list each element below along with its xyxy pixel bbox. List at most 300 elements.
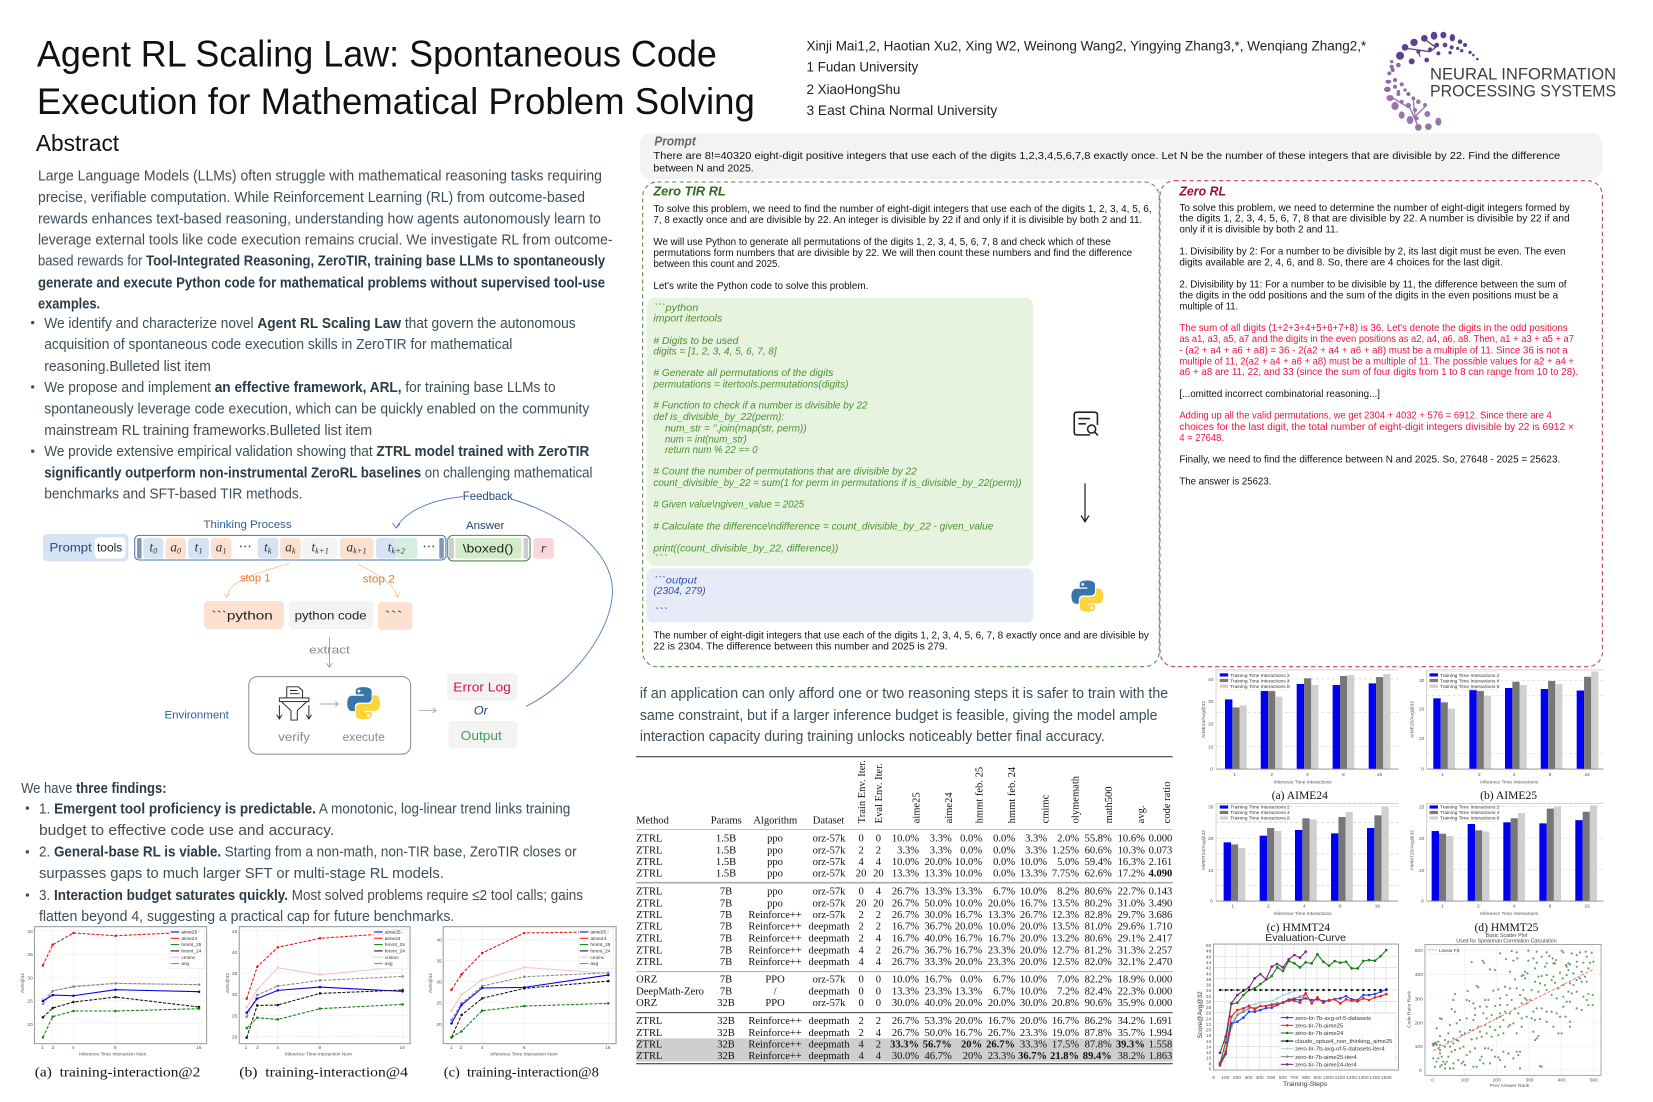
table rows: deepmath [809,922,850,933]
caption b: (b) training-interaction@4 [239,1064,408,1080]
thinking process token sequence: k [292,545,296,555]
error log box: Error Log [453,681,511,695]
bar chart: AIME25: 2 [1478,772,1481,778]
caption: HMMT24: (c) HMMT24 [1267,921,1330,934]
line chart: training-interaction@4: 40 [232,950,238,956]
line chart: evaluation curve: 900 [1314,1075,1322,1081]
table rows: 2 [858,845,864,856]
line chart: training-interaction@2: 25 [27,999,33,1005]
authors and affiliations: 1 Fudan University [806,60,918,75]
reasoning text: Let's write the Python code to solve this problem. [653,281,868,292]
table rows: Reinforce++ [748,1016,802,1027]
table rows: 0.0% [993,857,1015,868]
line chart: evaluation curve: 300 [1244,1075,1253,1081]
table rows: 16.7% [1052,1016,1079,1027]
table rows: 13.2% [1052,934,1079,945]
line chart: training-interaction@4: AVG@32 [225,973,231,993]
code block: ```python [655,302,699,314]
bar chart: HMMT24 [1201,803,1398,917]
legend: zero-tir-7b-aime25 [1295,1023,1344,1029]
bar chart: AIME24 [1201,670,1398,785]
bar chart: AIME24: 20 [1208,721,1214,727]
table rows: 36.7% [925,945,952,956]
reasoning text: To solve this problem, we need to determine the number of eight-digit integers formed by [1179,203,1571,214]
table rows: 7B [720,945,732,956]
code block: import itertools [653,314,722,325]
line chart: training-interaction@8: AVG@32 [428,973,434,993]
text block: abstract: generate and execute Python code for mathematical problems without supervised tool-use [38,275,605,291]
table rows: orz-57k [813,974,846,985]
bar chart: AIME25: 10 [1419,736,1425,742]
table rows: 2 [858,934,864,945]
table rows: 32B [717,1051,735,1062]
thinking process token sequence: k+1 [315,545,329,555]
table rows: orz-57k [813,857,846,868]
table rows: 33.3% [1020,1039,1047,1050]
line chart: evaluation curve: 1200 [1346,1075,1357,1081]
table rows: ZTRL [636,1028,662,1039]
table rows: 0.0% [960,974,982,985]
table rows: 3.3% [1025,845,1047,856]
table rows: ppo [767,857,783,868]
table rows: 7B [720,910,732,921]
feedback arrow [393,489,612,706]
line chart: training-interaction@8: 20 [436,1022,442,1028]
bar chart: HMMT25: 25 [1419,805,1425,811]
table rows: 4 [858,957,864,968]
table rows: ppo [767,834,783,845]
table rows: 1.25% [1052,845,1079,856]
table rows: 26.7% [1020,910,1047,921]
python code tokens: ``` [385,608,403,622]
table rows: 21.8% [1050,1051,1079,1062]
table rows: Reinforce++ [748,1039,802,1050]
table rows: 20.0% [955,1016,982,1027]
table rows: 6.7% [993,986,1015,997]
table rows: 6.7% [993,887,1015,898]
line chart: evaluation curve: 400 [1256,1075,1264,1081]
table rows: 81.2% [1085,945,1112,956]
caption: HMMT25: (d) HMMT25 [1474,921,1539,934]
line chart: training-interaction@4: 2 [256,1045,259,1051]
table rows: 40.0% [925,934,952,945]
line chart: training-interaction@8: hmmt_25 [590,942,611,948]
scatter plot [1407,933,1601,1089]
bar chart: HMMT25: 16 [1584,904,1590,910]
line chart: evaluation curve: 1300 [1358,1075,1369,1081]
reasoning text: The answer is 25623. [1179,476,1271,487]
line chart: training-interaction@4: 30 [232,992,238,998]
table rows: 17.2% [1118,869,1145,880]
line chart: training-interaction@2: aime25 [181,930,197,936]
table rows: 20.0% [1020,957,1047,968]
bar chart: HMMT24: Training Time Interactions 4 [1230,810,1290,816]
line chart: training-interaction@4: 4 [276,1045,279,1051]
bar chart: HMMT24: 20 [1208,836,1214,842]
line chart: evaluation curve: 46 [1206,954,1212,960]
text block: abstract: based rewards for Tool-Integrated Reasoning, ZeroTIR, training base LLMs to spontaneously [38,254,606,270]
table rows: 23.3% [988,945,1015,956]
table rows: 12.5% [1052,957,1079,968]
table rows: 26.7% [892,910,919,921]
line chart: evaluation curve: 1500 [1381,1075,1392,1081]
line chart: training-interaction@8: cmimc [590,955,605,961]
legend: claude_optus4_non_thinking_aime25 [1295,1039,1393,1045]
table rows: orz-57k [813,834,846,845]
bar chart: AIME24: Training Time Interactions 8 [1230,684,1290,690]
table rows: ppo [767,887,783,898]
environment box: verify [278,732,310,744]
table rows: 0 [858,986,864,997]
line chart: training-interaction@8: 8 [523,1045,526,1051]
table rows: 26.7% [986,1039,1015,1050]
table rows: 0.0% [960,834,982,845]
table rows: 50.0% [925,898,952,909]
table header: hmmt feb. 25 [975,767,986,823]
legend: zero-tir-7b-avg-of-5-datasets [1295,1016,1371,1022]
table rows: 56.7% [923,1039,952,1050]
line chart: training-interaction@8: 16 [605,1045,611,1051]
table rows: deepmath [809,1028,850,1039]
table rows: ORZ [636,998,657,1009]
table rows: Reinforce++ [748,934,802,945]
scatter plot: 500 [1590,1077,1598,1083]
table rows: 4 [858,857,864,868]
answer box: \boxed() [463,541,513,555]
table rows: 32B [717,1028,735,1039]
table rows: 2 [876,1039,881,1050]
table rows: 20 [856,898,866,909]
table rows: 36.7% [1018,1051,1047,1062]
line chart: training-interaction@2: 8 [114,1045,117,1051]
reasoning text: Finally, we need to find the difference between N and 2025. So, 27648 - 2025 = 25623. [1179,455,1560,466]
bar chart: HMMT25: 2 [1477,904,1480,910]
table rows: 10.0% [892,834,919,845]
table rows: ZTRL [636,834,662,845]
bar chart: HMMT25: 4 [1513,904,1516,910]
line chart: evaluation curve: 600 [1279,1075,1287,1081]
table rows: deepmath [809,1039,850,1050]
curves [1220,950,1386,1066]
line chart: evaluation curve: 14 [1206,1044,1212,1050]
scatter legend [1427,946,1460,954]
table rows: 16.3% [1118,857,1145,868]
table rows: 20% [963,1051,982,1062]
thinking process token sequence: k+2 [391,545,406,555]
code block [647,298,1033,566]
reasoning text: 1. Divisibility by 2: For a number to be divisible by 2, its last digit must be even. The even [1179,247,1566,258]
text block: findings [21,781,583,925]
table rows: 20.8% [1052,998,1079,1009]
table rows: 10.0% [1020,974,1047,985]
table rows: 16.7% [925,974,952,985]
table rows: 4 [876,957,882,968]
table rows: 87.8% [1085,1028,1112,1039]
scatter plot: 500 [1415,948,1423,954]
table rows: 19.0% [1052,1028,1079,1039]
table header: hmmt feb. 24 [1007,766,1018,823]
table rows: 2 [876,945,881,956]
line chart: training-interaction@4: 20 [232,1034,238,1040]
icon: document search [1074,412,1098,435]
table rows: 53.3% [925,1016,952,1027]
thinking process token sequence: a [216,539,222,554]
stop arrows: stop 2 [363,574,395,586]
table rows: 2 [858,1028,864,1039]
line chart: evaluation curve: 12 [1206,1050,1212,1056]
table rows: 1.5B [716,834,736,845]
code block: count_divisible_by_22 = sum(1 for perm in permutations if is_divisible_by_22(perm)) [653,478,1022,489]
line chart: evaluation curve: 28 [1206,1005,1212,1011]
bar chart: HMMT25: HMMT25/Avg@32 [1410,830,1416,870]
scatter plot: Basic Scatter Plot [1486,933,1528,939]
line chart: training-interaction@8: avg [590,962,598,967]
panel: prompt: There are 8!=40320 eight-digit positive integers that use each of the digits 1,2,3,4,5,6,7,8 exactly once. Let N be the number of these integers that are divisible by 22. Find the difference [653,151,1560,162]
line chart: evaluation curve: 20 [1206,1028,1212,1034]
heading: Zero TIR RL: Zero TIR RL [652,183,726,198]
table rows: 29.6% [1118,922,1145,933]
table rows: 20 [873,898,884,909]
reasoning text: between this count and 2025. [653,259,780,270]
line chart: training-interaction@4: hmmt_24 [385,948,405,954]
table rows: 89.4% [1083,1051,1112,1062]
line chart: training-interaction@8: 30 [436,980,442,986]
reasoning text: To solve this problem, we need to find the number of eight-digit integers that use each of the digits 1, 2, 3, 4, 5, 6, [653,204,1152,215]
table rows: 30.0% [892,998,919,1009]
bar chart: AIME24: 1 [1233,772,1236,778]
table rows: 1.710 [1149,922,1172,933]
thinking process token sequence: 1 [198,545,203,555]
thinking process token sequence [135,519,446,560]
table rows: 87.8% [1085,1039,1112,1050]
conclusion text: The number of eight-digit integers that use each of the digits 1, 2, 3, 4, 5, 6, 7, 8 exactly once and are divisible by [653,630,1150,641]
bar chart: HMMT25: Training Time Interactions 4 [1440,810,1500,816]
table rows: 4 [876,857,882,868]
table rows [636,834,1173,1062]
code block: num_str = ''.join(map(str, perm)) [665,424,807,435]
table rows: 33.3% [925,957,952,968]
table rows: 29.1% [1118,934,1145,945]
bar chart: HMMT24: 16 [1375,904,1380,910]
line chart: evaluation curve: 50 [1206,943,1212,949]
code block: num = int(num_str) [665,434,747,445]
bar chart: AIME24: 10 [1208,745,1214,751]
table rows: 80.6% [1085,887,1112,898]
title [37,33,755,122]
prompt box: Prompt [50,541,92,555]
table rows: 2.257 [1149,945,1172,956]
table rows: 1.5B [716,857,736,868]
table rows: 20.0% [955,957,982,968]
bullet list: contributions: significantly outperform non-instrumental ZeroRL baselines on challenging mathematical [44,466,592,482]
table rows: 10.0% [955,869,982,880]
table rows: 10.0% [892,974,919,985]
table rows: 2 [858,910,864,921]
table rows: 7B [720,922,732,933]
code block: digits = [1, 2, 3, 4, 5, 6, 7, 8] [653,347,777,358]
line chart: training-interaction@8: 2 [460,1045,463,1051]
table rows: 23.3% [988,957,1015,968]
table rows: 38.2% [1118,1051,1145,1062]
table rows: ZTRL [636,857,662,868]
table rows: 10.0% [1020,857,1047,868]
table rows: PPO [765,998,785,1009]
line chart: evaluation curve: 38 [1206,977,1212,983]
table rows: 33.3% [890,1039,919,1050]
bar chart: AIME25: AIME25/Avg@32 [1410,701,1416,738]
results table [636,757,1173,1064]
table rows: 20.0% [955,998,982,1009]
table rows: Reinforce++ [748,910,802,921]
line chart: evaluation curve: 42 [1206,966,1212,972]
logo: NeurIPS: NEURAL INFORMATION [1430,65,1616,83]
table rows: 3.3% [897,845,919,856]
table rows: 82.0% [1085,957,1112,968]
logo: NeurIPS [1384,32,1616,130]
table rows: ZTRL [636,957,662,968]
table rows: 7.0% [1057,974,1079,985]
reasoning text: 7, 8 exactly once and are divisible by 22. An integer is divisible by 22 if and only if it is divisible by both 2 and 11. [653,215,1142,226]
caption c: (c) training-interaction@8 [444,1064,599,1080]
line chart: training-interaction@4: 1 [245,1045,248,1051]
scatter plot: Prev Answer Rank [1490,1083,1530,1089]
table rows: orz-57k [813,898,846,909]
table rows: 7B [720,974,732,985]
table rows: 7B [720,986,732,997]
scatter plot: 0 [1419,1068,1422,1074]
line chart: evaluation curve: 34 [1206,988,1212,994]
line chart: training-interaction@2: cmimc [181,955,196,961]
table rows: Reinforce++ [748,1051,802,1062]
prompt box: tools [97,540,122,554]
table rows: 10.0% [892,857,919,868]
table rows: 3.490 [1149,898,1172,909]
table rows: 62.6% [1085,869,1112,880]
table rows: ppo [767,898,783,909]
bar chart: AIME24: 2 [1270,772,1273,778]
line chart: training-interaction@8: 1 [450,1045,453,1051]
table rows: 16.7% [988,1016,1015,1027]
output block: (2304, 279) [653,586,706,597]
line chart: training-interaction@8: 25 [436,1001,442,1007]
table rows: 0 [876,974,881,985]
table rows: 22.3% [1118,986,1145,997]
text block: training constraint note: interaction capacity during training unlocks noticeably better final accuracy. [640,729,1105,745]
bar chart: HMMT25: 0 [1421,898,1424,904]
reasoning text: Adding up all the valid permutations, we get 2304 + 4032 + 576 = 6912. Since there are 4 [1179,411,1552,422]
table rows: orz-57k [813,887,846,898]
table rows: 2.0% [1057,834,1079,845]
code block: # Generate all permutations of the digits [653,368,833,379]
line chart: training-interaction@4: 16 [400,1045,405,1051]
table rows: 20.0% [955,922,982,933]
line chart: training-interaction@2: 1 [41,1045,44,1051]
table rows: 55.8% [1085,834,1112,845]
bar chart: HMMT25: 1 [1441,904,1444,910]
bar chart: HMMT25: 20 [1419,836,1425,842]
table rows: 10.0% [1020,887,1047,898]
table rows: 4 [858,1051,864,1062]
line chart: evaluation curve: 500 [1267,1075,1276,1081]
arrow: code to execution [1081,483,1089,522]
thinking process token sequence: k+1 [353,545,367,555]
table rows: 20.0% [925,857,952,868]
table rows: 4 [876,887,882,898]
table rows: 59.4% [1085,857,1112,868]
table rows: Reinforce++ [748,922,802,933]
line chart: training-interaction@2: hmmt_25 [181,942,202,948]
text block: training constraint note: if an application can only afford one or two reasoning steps it is safer to train with the [640,686,1168,702]
output block: ```output [655,574,698,586]
bar chart: HMMT24: Training Time Interactions 8 [1230,816,1290,822]
table rows: 13.3% [988,910,1015,921]
table header: code ratio [1162,782,1173,823]
table rows: 60.6% [1085,845,1112,856]
text block: findings: 1. Emergent tool proficiency is predictable. A monotonic, log-linear trend links training [39,801,570,817]
title: Execution for Mathematical Problem Solving [37,81,755,122]
table rows: 16.7% [988,934,1015,945]
line chart: training-interaction@4: 45 [232,929,238,935]
reasoning text: [...omitted incorrect combinatorial reasoning...] [1179,389,1380,400]
table rows: 12.3% [1052,910,1079,921]
table rows: ZTRL [636,845,662,856]
bullet list: contributions [31,316,592,503]
table header: Train Env. Iter. [857,760,868,823]
bar chart: AIME25: 4 [1513,772,1516,778]
bullet list: contributions: We identify and characterize novel Agent RL Scaling Law that govern the autonomous [44,316,576,332]
reasoning text: - (a2 + a4 + a6 + a8) = 36 - 2(a2 + a4 + a6 + a8) must be a multiple of 11. Since 36 is not a [1179,345,1568,356]
text block: abstract [38,168,613,312]
arrow to result [419,708,436,713]
table rows: 20.0% [988,998,1015,1009]
table rows: 13.3% [892,986,919,997]
table rows: ZTRL [636,887,662,898]
table rows: 0.0% [993,845,1015,856]
bar chart: AIME24: Training Time Interactions 4 [1230,678,1290,684]
code block: # Digits to be used [653,336,739,347]
table rows: Reinforce++ [748,957,802,968]
table header: olymemath [1070,775,1081,823]
line chart: evaluation curve: 30 [1206,999,1212,1005]
table rows: 1.863 [1149,1051,1172,1062]
table rows: 3.3% [1025,834,1047,845]
line chart: training-interaction@8: 40 [436,937,442,943]
authors and affiliations [806,39,1367,118]
table rows: 20.0% [1020,934,1047,945]
table rows: 4 [858,945,864,956]
text block: findings: flatten beyond 4, suggesting a practical cap for future benchmarks. [39,909,454,925]
table rows: 0.000 [1149,834,1172,845]
line chart: training-interaction@8: hmmt_24 [590,948,611,954]
table header: Method [636,815,670,826]
bar chart: HMMT25 [1410,803,1603,917]
text block: abstract: examples. [38,296,100,312]
table rows: 10.0% [1020,986,1047,997]
table rows: 1.691 [1149,1016,1172,1027]
bar chart: AIME24: 16 [1377,772,1382,778]
table header: aime25 [911,792,922,823]
code block: # Given value\ngiven_value = 2025 [653,500,805,511]
table header: math500 [1104,786,1115,823]
environment label: Environment [164,709,229,721]
reasoning text: the digits in the odd positions and the sum of the digits in the even positions must be a [1179,291,1558,302]
thinking process token sequence: k [268,545,272,555]
table rows: 82.4% [1085,986,1112,997]
table rows: 2 [858,922,864,933]
table rows: 90.6% [1085,998,1112,1009]
heading: Abstract: Abstract [36,130,120,156]
table rows: 7B [720,898,732,909]
